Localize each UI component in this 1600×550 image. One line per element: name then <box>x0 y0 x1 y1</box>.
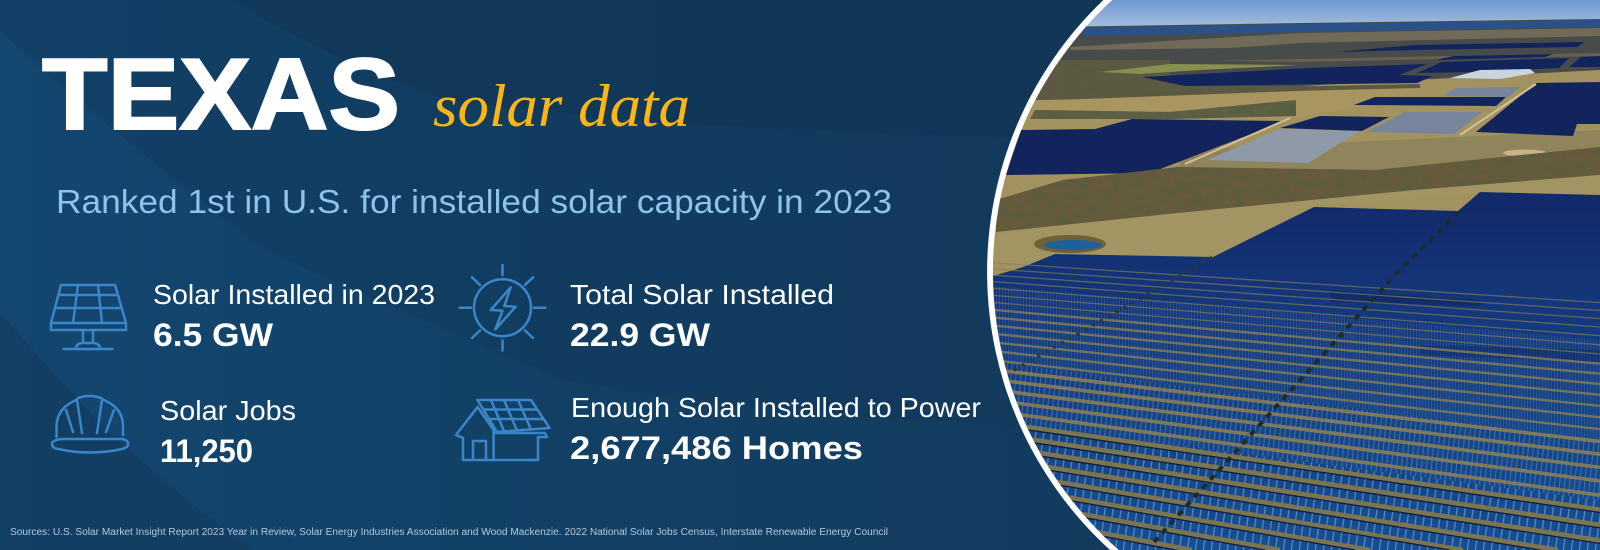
panel row lines <box>980 262 1600 550</box>
stat: homes powered <box>570 392 981 466</box>
band of trees <box>996 147 1600 232</box>
front field <box>980 175 1600 275</box>
sources: Sources: U.S. Solar Market Insight Report 2023 Year in Review, Solar Energy Industries Association and Wood Mackenzie. 2022 National Solar Jobs Census, Interstate Renewable Energy Council <box>10 527 888 538</box>
subtitle script: solar data <box>433 73 690 139</box>
title: TEXAS <box>42 39 400 151</box>
ground <box>980 70 1600 300</box>
stat: solar jobs: Solar Jobs <box>160 395 296 426</box>
icon: sun with lightning bolt <box>460 265 545 350</box>
inverter columns <box>1014 257 1213 370</box>
ranking statement: Ranked 1st in U.S. for installed solar capacity in 2023 <box>56 183 892 220</box>
icon: solar panel <box>51 285 126 349</box>
sky <box>1083 0 1600 30</box>
far solar blocks <box>1006 42 1600 175</box>
grey solar blocks <box>1207 87 1520 163</box>
photo: aerial view of solar farm <box>980 0 1600 550</box>
stat: homes powered: Enough Solar Installed to Power <box>571 392 981 423</box>
stat: solar installed in 2023 <box>153 279 435 353</box>
stat: total solar installed <box>570 279 834 353</box>
stat: solar installed in 2023: Solar Installed in 2023 <box>153 279 435 310</box>
pond <box>1034 235 1106 253</box>
stat: solar installed in 2023: 6.5 GW <box>153 317 274 353</box>
tracks and substation <box>1185 84 1536 164</box>
icon: house with rooftop solar <box>456 400 550 460</box>
stat: solar jobs <box>160 395 296 469</box>
stat: homes powered: 2,677,486 Homes <box>570 430 863 466</box>
stat: total solar installed: Total Solar Installed <box>570 279 834 310</box>
front solar array <box>980 192 1600 550</box>
stat: solar jobs: 11,250 <box>160 433 253 469</box>
icon: hard hat <box>52 396 128 452</box>
distant land <box>980 19 1600 120</box>
stat: total solar installed: 22.9 GW <box>570 317 711 353</box>
